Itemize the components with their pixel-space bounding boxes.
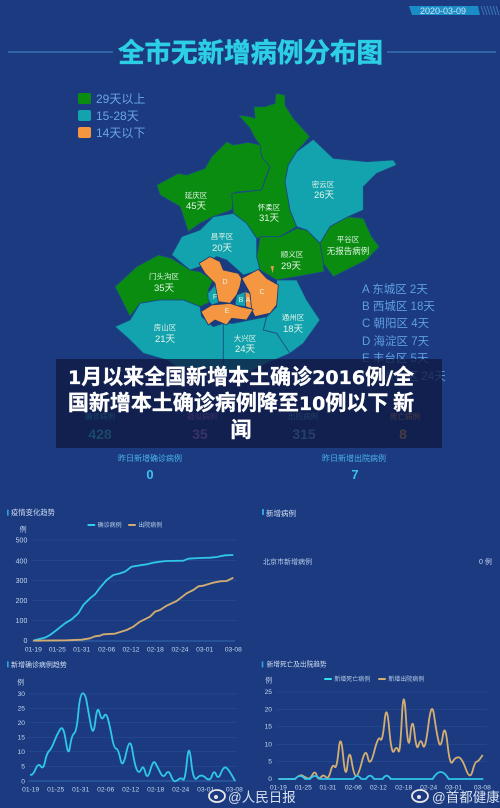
map labels: F — [213, 294, 217, 301]
map of Beijing districts — [115, 93, 397, 372]
chart: new deaths and discharges trend: 02-18 — [395, 784, 412, 791]
watermark: People's Daily: @人民日报 — [228, 790, 296, 805]
stats row: 428 — [88, 426, 112, 442]
map labels: B — [239, 297, 244, 304]
watermark: Capital Health: @首都健康 — [432, 789, 500, 805]
district: Fangshan — [115, 300, 223, 370]
panel: new cases: 新增病例 — [266, 508, 296, 518]
map labels: D — [222, 279, 228, 286]
map labels: 大兴区 — [234, 333, 257, 343]
map labels: 无报告病例 — [327, 246, 369, 256]
chart: new confirmed trend: 15 — [18, 735, 25, 742]
chart: epidemic trend: 出院病例 — [138, 521, 162, 529]
chart: new deaths and discharges trend: 25 — [265, 689, 272, 696]
district: Tongzhou — [263, 280, 320, 353]
chart: epidemic trend — [7, 508, 242, 653]
panel: new cases — [262, 508, 492, 566]
chart: new confirmed trend: 02-18 — [147, 786, 164, 793]
chart: new confirmed trend: 02-12 — [122, 786, 139, 793]
map labels: 21天 — [155, 334, 176, 345]
chart: new confirmed trend: 20 — [18, 720, 25, 727]
map labels: A — [246, 297, 251, 304]
map labels: C — [259, 289, 265, 296]
district: Changping — [172, 213, 260, 275]
map labels: E — [225, 308, 230, 315]
yesterday stats: 7 — [351, 467, 359, 482]
district: Huairou — [232, 93, 310, 238]
chart: epidemic trend: 02-24 — [171, 646, 189, 653]
map labels: 密云区 — [312, 179, 335, 189]
headline overlay: 国新增本土确诊病例降至10例以下 新 — [68, 387, 414, 417]
chart: new confirmed trend: 30 — [18, 691, 25, 698]
chart: new deaths and discharges trend: 5 — [268, 759, 272, 766]
yesterday stats: 昨日新增出院病例 — [322, 453, 386, 463]
chart: new confirmed trend — [7, 660, 243, 793]
chart: new deaths and discharges trend: 10 — [265, 741, 272, 748]
chart: new deaths and discharges trend: 20 — [265, 706, 272, 713]
headline overlay: 1月以来全国新增本土确诊2016例/全 — [68, 361, 414, 391]
date tag — [409, 6, 499, 16]
map labels: 延庆区 — [185, 190, 208, 200]
map labels: 昌平区 — [211, 232, 234, 241]
chart: new deaths and discharges trend: 02-24 — [420, 784, 437, 791]
map key list: F 石景山区 24天 — [362, 370, 446, 383]
chart: new confirmed trend: 01-31 — [72, 786, 89, 793]
chart: new deaths and discharges trend: 03-08 — [474, 784, 491, 791]
stats row: 疑似病例 — [187, 411, 217, 421]
district: Dongcheng — [245, 292, 253, 309]
map key list: E 丰台区 5天 — [362, 351, 429, 365]
chart: epidemic trend: 03-08 — [225, 646, 242, 653]
marker: small orange mark — [271, 266, 274, 273]
chart: epidemic trend: 02-18 — [147, 646, 164, 653]
chart: new deaths and discharges trend: 例 — [265, 676, 272, 685]
stats row: 35 — [192, 426, 208, 442]
district: Shunyi — [257, 228, 324, 280]
map labels: 怀柔区 — [258, 202, 281, 212]
district: Pinggu — [320, 217, 379, 277]
district: Fengtai — [201, 303, 253, 325]
district: Yanqing — [157, 142, 270, 232]
chart: epidemic trend: 500 — [16, 538, 27, 545]
chart: new deaths and discharges trend: 02-12 — [370, 784, 387, 791]
chart: new deaths and discharges trend: 01-19 — [270, 784, 287, 791]
chart: new deaths and discharges trend: 01-31 — [319, 784, 337, 791]
map labels: 18天 — [283, 324, 304, 335]
chart: epidemic trend: 0 — [23, 638, 27, 645]
map labels: 顺义区 — [281, 250, 304, 259]
district: Chaoyang — [242, 269, 278, 317]
chart: new deaths and discharges trend: 新增出院病例 — [388, 675, 424, 683]
district: Xicheng — [235, 292, 246, 307]
district: Miyun — [285, 139, 397, 243]
headline overlay — [56, 359, 442, 448]
chart: new confirmed trend: 例 — [17, 678, 24, 687]
chart: epidemic trend: 例 — [20, 525, 27, 534]
map key list: C 朝阳区 4天 — [362, 317, 430, 330]
legend: 14天以下 — [96, 126, 145, 140]
chart: epidemic trend: 03-01 — [196, 646, 213, 653]
date tag: 2020-03-09 — [420, 6, 466, 16]
map labels: 房山区 — [154, 322, 177, 332]
chart: new confirmed trend: 03-01 — [197, 786, 214, 793]
chart: epidemic trend: 01-25 — [49, 646, 66, 653]
chart: new confirmed trend: 02-06 — [97, 786, 114, 793]
yesterday stats: 0 — [146, 467, 154, 482]
chart: new deaths and discharges trend: 01-25 — [295, 784, 312, 791]
legend: 15-28天 — [96, 109, 139, 123]
map key list — [362, 283, 446, 383]
map labels: 20天 — [212, 243, 233, 254]
panel: new cases: 0 例 — [479, 557, 492, 566]
chart: new confirmed trend: 03-08 — [226, 786, 243, 793]
yesterday stats — [118, 453, 386, 482]
legend — [78, 92, 145, 140]
chart: new deaths and discharges trend: 新增死亡病例 — [334, 675, 370, 683]
chart: new deaths and discharges trend: 15 — [265, 724, 272, 731]
map key list: B 西城区 18天 — [362, 300, 435, 313]
stats row: 出院病例 — [288, 411, 318, 421]
chart: epidemic trend: 疫情变化趋势 — [11, 508, 56, 517]
map labels: 29天 — [281, 261, 302, 272]
chart: new confirmed trend: 5 — [21, 763, 25, 770]
stats row: 8 — [399, 426, 407, 442]
map labels: 通州区 — [282, 312, 305, 322]
district: Shijingshan — [208, 285, 222, 305]
chart: new deaths and discharges trend — [262, 660, 491, 791]
headline overlay: 闻 — [230, 414, 252, 444]
district: Haidian — [199, 257, 242, 303]
chart: new confirmed trend: 新增确诊病例趋势 — [11, 660, 67, 669]
stats row: 315 — [292, 426, 316, 442]
chart: epidemic trend: 01-19 — [25, 646, 42, 653]
map key list: A 东城区 2天 — [362, 283, 428, 296]
yesterday stats: 昨日新增确诊病例 — [118, 453, 182, 463]
title: 全市无新增病例分布图 — [118, 38, 383, 68]
chart: new deaths and discharges trend: 新增死亡及出院趋势 — [267, 660, 327, 669]
map labels: 26天 — [314, 190, 335, 201]
chart: new confirmed trend: 01-25 — [47, 786, 64, 793]
district: Daxing — [223, 317, 290, 372]
chart: new confirmed trend: 0 — [21, 778, 25, 785]
panel: new cases: 北京市新增病例 — [263, 557, 312, 566]
map labels: 35天 — [154, 283, 175, 294]
chart: epidemic trend: 02-12 — [122, 646, 140, 653]
chart: epidemic trend: 100 — [16, 618, 27, 625]
chart: new confirmed trend: 02-24 — [172, 786, 189, 793]
chart: epidemic trend: 02-06 — [98, 646, 115, 653]
map labels: 24天 — [235, 344, 256, 355]
map labels: 平谷区 — [337, 235, 360, 244]
chart: new confirmed trend: 25 — [18, 706, 25, 713]
chart: epidemic trend: 200 — [16, 598, 27, 605]
map key list: D 海淀区 7天 — [362, 334, 430, 348]
chart: new deaths and discharges trend: 02-06 — [345, 784, 362, 791]
stats row: 死亡病例 — [390, 411, 420, 421]
chart: new deaths and discharges trend: 0 — [268, 776, 272, 783]
chart: epidemic trend: 确诊病例 — [98, 521, 122, 529]
map labels — [149, 179, 369, 355]
chart: epidemic trend: 400 — [16, 558, 27, 565]
map labels: 45天 — [186, 201, 207, 212]
legend: 29天以上 — [96, 92, 145, 106]
map labels: 31天 — [259, 213, 280, 224]
stats row: 确诊病例 — [85, 411, 115, 421]
map labels: 门头沟区 — [149, 271, 179, 281]
stats row — [85, 411, 420, 442]
chart: new deaths and discharges trend: 03-01 — [445, 784, 462, 791]
chart: new confirmed trend: 10 — [18, 749, 25, 756]
chart: new confirmed trend: 01-19 — [22, 786, 39, 793]
chart: epidemic trend: 300 — [16, 578, 27, 585]
chart: epidemic trend: 01-31 — [73, 646, 90, 653]
district: Mentougou — [115, 255, 215, 317]
